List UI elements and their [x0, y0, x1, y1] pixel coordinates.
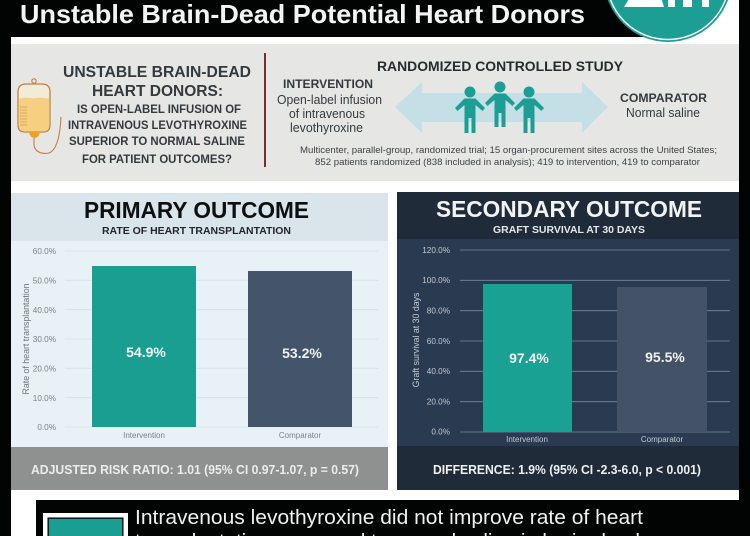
study details — [300, 145, 717, 167]
question heading: FOR PATIENT OUTCOMES? — [82, 152, 232, 166]
icon: conclusion swatch — [43, 513, 128, 536]
icon: journal badge — [604, 0, 732, 42]
bar chart: graft survival at 30 days: 97.4% — [509, 350, 549, 366]
panel: conclusion — [36, 500, 750, 536]
panel: study design — [11, 44, 739, 181]
secondary heading: SECONDARY OUTCOME — [436, 196, 702, 222]
primary heading — [84, 197, 309, 237]
bar chart: rate of heart transplantation: 50.0% — [33, 276, 56, 286]
study details: Multicenter, parallel-group, randomized trial; 15 organ-procurement sites across the United States; — [300, 145, 717, 155]
bar chart: rate of heart transplantation: 10.0% — [33, 394, 56, 403]
arrow: randomization — [395, 82, 608, 133]
bar chart: rate of heart transplantation — [21, 247, 378, 440]
primary heading: PRIMARY OUTCOME — [84, 197, 309, 223]
study details: 852 patients randomized (838 included in analysis); 419 to intervention, 419 to comparator — [315, 157, 700, 167]
primary result: ADJUSTED RISK RATIO: 1.01 (95% CI 0.97-1.07, p = 0.57) — [31, 463, 359, 477]
secondary heading: GRAFT SURVIVAL AT 30 DAYS — [493, 224, 645, 236]
bar chart: graft survival at 30 days: 100.0% — [422, 276, 450, 285]
icon: IV bag — [18, 79, 61, 154]
question heading: INTRAVENOUS LEVOTHYROXINE — [68, 118, 247, 132]
bar chart: rate of heart transplantation: 0.0% — [37, 423, 56, 432]
intervention label: INTERVENTION — [283, 77, 373, 91]
intervention label — [277, 77, 382, 135]
bar chart: graft survival at 30 days: Comparator — [641, 435, 683, 444]
bar chart: rate of heart transplantation: 40.0% — [33, 306, 56, 315]
bar chart: graft survival at 30 days: 120.0% — [422, 246, 450, 255]
bar chart: rate of heart transplantation: Intervention — [123, 431, 165, 440]
bar chart: graft survival at 30 days: 95.5% — [645, 349, 685, 365]
primary heading: RATE OF HEART TRANSPLANTATION — [102, 225, 291, 237]
comparator label: COMPARATOR — [620, 91, 707, 105]
bar chart: graft survival at 30 days: 20.0% — [427, 398, 450, 406]
bar chart: graft survival at 30 days: 40.0% — [427, 367, 450, 376]
panel: secondary outcome — [397, 192, 739, 490]
intervention label: Open-label infusion — [277, 93, 382, 107]
intervention label: of intravenous — [289, 107, 365, 121]
bar chart: rate of heart transplantation: 20.0% — [33, 364, 56, 374]
question heading: IS OPEN-LABEL INFUSION OF — [77, 102, 241, 116]
bar chart: rate of heart transplantation: 60.0% — [33, 247, 56, 256]
icon: patients — [455, 82, 544, 133]
question heading: UNSTABLE BRAIN-DEAD — [63, 64, 251, 81]
bar chart: graft survival at 30 days: Intervention — [506, 435, 548, 444]
secondary result: DIFFERENCE: 1.9% (95% CI -2.3-6.0, p < 0.001) — [433, 463, 701, 477]
bar chart: graft survival at 30 days: 0.0% — [431, 428, 450, 436]
study type heading: RANDOMIZED CONTROLLED STUDY — [377, 59, 623, 74]
conclusion text: Intravenous levothyroxine did not improve rate of heart — [135, 506, 643, 529]
bar chart: graft survival at 30 days — [411, 246, 730, 444]
bar chart: rate of heart transplantation: Comparator — [279, 431, 321, 440]
bar chart: rate of heart transplantation: 53.2% — [282, 345, 322, 361]
intervention label: levothyroxine — [290, 121, 363, 135]
question heading: SUPERIOR TO NORMAL SALINE — [69, 134, 245, 148]
bar chart: graft survival at 30 days: 80.0% — [427, 306, 450, 316]
question heading: HEART DONORS: — [92, 83, 223, 100]
comparator label — [620, 91, 707, 120]
bar chart: graft survival at 30 days: Graft survival at 30 days — [411, 292, 421, 387]
bar chart: rate of heart transplantation: 54.9% — [126, 344, 166, 360]
panel: primary outcome — [11, 193, 388, 490]
bar chart: rate of heart transplantation: 30.0% — [33, 335, 56, 344]
comparator label: Normal saline — [626, 106, 700, 120]
secondary heading — [436, 196, 702, 236]
bar chart: graft survival at 30 days: 60.0% — [427, 337, 450, 346]
bar chart: rate of heart transplantation: Rate of heart transplantation — [21, 283, 31, 395]
question heading — [63, 64, 251, 166]
